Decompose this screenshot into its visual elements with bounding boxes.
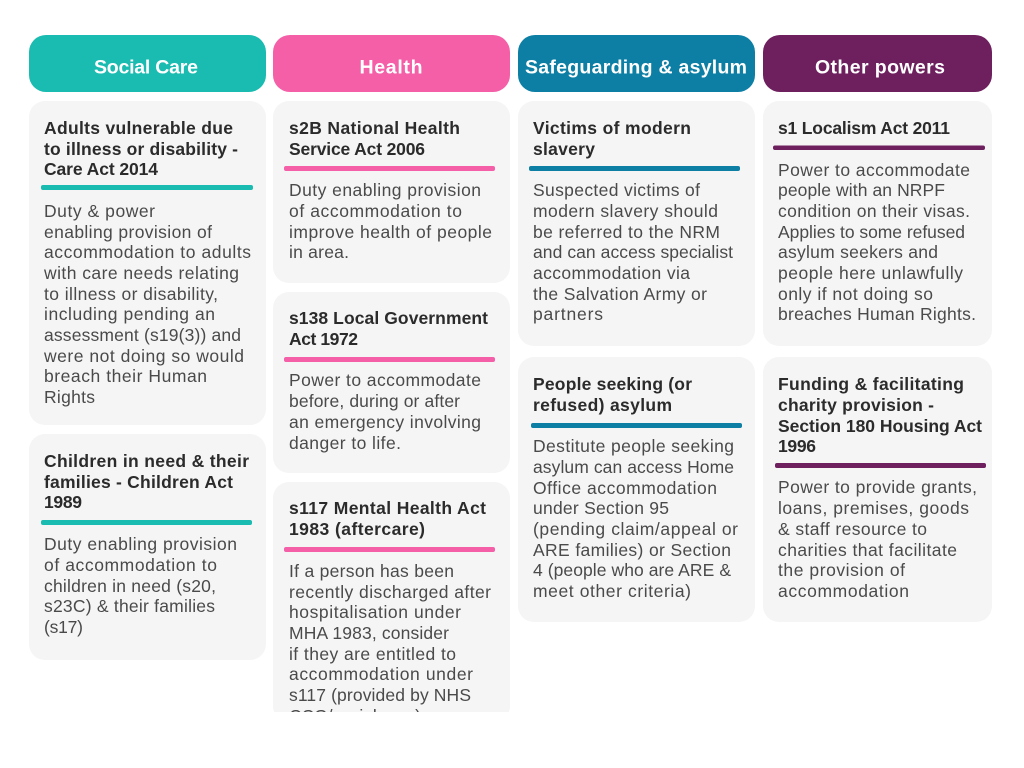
card: People seeking (or refused) asylum: People seeking (or [533,374,692,394]
card: Adults vulnerable, Care Act 2014 [29,101,266,425]
card: Adults vulnerable, Care Act 2014: Duty & power [44,201,155,221]
card: People seeking (or refused) asylum: meet other criteria) [533,581,691,601]
card: s2B National Health Service Act 2006: in area. [289,242,349,262]
header: Health [273,35,510,92]
card: Adults vulnerable, Care Act 2014: accommodation to adults [44,242,251,262]
card: Funding & facilitating charity provision, Section 180: Funding & facilitating [778,374,964,394]
card: Victims of modern slavery: slavery [533,139,595,159]
card: s117 Mental Health Act 1983 (aftercare): hospitalisation under [289,602,461,622]
card: Adults vulnerable, Care Act 2014: with care needs relating [43,263,239,283]
card: Victims of modern slavery: the Salvation Army or [533,284,707,304]
card: s117 Mental Health Act 1983 (aftercare): recently discharged after [289,582,491,602]
card: People seeking (or refused) asylum [518,357,755,622]
card: Children in need, Children Act 1989: 1989 [44,492,82,512]
card: Victims of modern slavery [518,101,755,346]
card: Children in need, Children Act 1989: families - Children Act [44,472,233,492]
card: People seeking (or refused) asylum: 4 (people who are ARE & [533,560,731,580]
card: Funding & facilitating charity provision, Section 180: loans, premises, goods [778,498,969,518]
card: Adults vulnerable, Care Act 2014: including pending an [44,304,215,324]
card: s1 Localism Act 2011 [763,101,992,346]
card: Funding & facilitating charity provision, Section 180: Section 180 Housing Act [778,416,982,436]
header: Safeguarding & asylum: Safeguarding & asylum [525,56,747,78]
card: s2B National Health Service Act 2006: improve health of people [289,222,492,242]
card: s117 Mental Health Act 1983 (aftercare): s117 (provided by NHS [289,685,471,705]
card: s2B National Health Service Act 2006 [273,101,510,283]
card: s138 Local Government Act 1972 [273,292,510,473]
card: s138 Local Government Act 1972: an emergency involving [289,412,481,432]
card: s1 Localism Act 2011: condition on their visas. [778,201,970,221]
card: People seeking (or refused) asylum: (pending claim/appeal or [533,519,738,539]
card: Funding & facilitating charity provision, Section 180: the provision of [778,560,905,580]
card: Victims of modern slavery: and can access specialist [533,242,733,262]
card: s1 Localism Act 2011: asylum seekers and [778,242,938,262]
card: s117 Mental Health Act 1983 (aftercare) [273,482,510,726]
card: s138 Local Government Act 1972: Power to accommodate [289,370,481,390]
header: Health: Health [360,56,422,78]
card: Funding & facilitating charity provision, Section 180: & staff resource to [778,519,927,539]
card: Children in need, Children Act 1989: Children in need & their [44,451,249,471]
card: Adults vulnerable, Care Act 2014: Care Act 2014 [44,159,158,179]
card: Adults vulnerable, Care Act 2014: Adults vulnerable due [44,118,233,138]
card: Children in need, Children Act 1989: (s17) [44,617,83,637]
card: s2B National Health Service Act 2006: Service Act 2006 [289,139,425,159]
card: s117 Mental Health Act 1983 (aftercare): 1983 (aftercare) [289,519,425,539]
card: s1 Localism Act 2011: Applies to some refused [778,222,965,242]
header: Other powers [763,35,992,92]
card: Victims of modern slavery: Suspected victims of [533,180,700,200]
card: s138 Local Government Act 1972: danger to life. [289,433,401,453]
card: People seeking (or refused) asylum: asylum can access Home [533,457,734,477]
card: s117 Mental Health Act 1983 (aftercare): if they are entitled to [289,644,456,664]
card: Adults vulnerable, Care Act 2014: were not doing so would [43,346,244,366]
panel: Social Care column [29,35,266,660]
card: s2B National Health Service Act 2006: Duty enabling provision [289,180,481,200]
card: People seeking (or refused) asylum: Office accommodation [533,478,717,498]
card: People seeking (or refused) asylum: ARE families) or Section [533,540,731,560]
panel: Health column [273,35,510,726]
card: Funding & facilitating charity provision, Section 180 [763,357,992,622]
card: Adults vulnerable, Care Act 2014: to illness or disability - [44,139,238,159]
card: s2B National Health Service Act 2006: of accommodation to [289,201,462,221]
card: Adults vulnerable, Care Act 2014: Rights [44,387,95,407]
card: Children in need, Children Act 1989 [29,434,266,660]
card: s138 Local Government Act 1972: before, during or after [289,391,460,411]
card: People seeking (or refused) asylum: under Section 95 [533,498,669,518]
card: People seeking (or refused) asylum: Destitute people seeking [533,436,734,456]
card: Funding & facilitating charity provision, Section 180: accommodation [778,581,909,601]
header: Social Care [29,35,266,92]
card: Funding & facilitating charity provision, Section 180: charities that facilitate [778,540,957,560]
card: s117 Mental Health Act 1983 (aftercare): If a person has been [289,561,454,581]
header: Other powers: Other powers [815,56,945,78]
header: Safeguarding & asylum [518,35,755,92]
card: s1 Localism Act 2011: people here unlawfully [778,263,963,283]
card: s1 Localism Act 2011: only if not doing so [778,284,933,304]
card: Children in need, Children Act 1989: children in need (s20, [44,576,216,596]
card: s117 Mental Health Act 1983 (aftercare): accommodation under [289,664,473,684]
panel: Other powers column [763,35,992,622]
card: s117 Mental Health Act 1983 (aftercare): MHA 1983, consider [289,623,449,643]
card: s117 Mental Health Act 1983 (aftercare): CCG/social care) [289,706,421,726]
card: Adults vulnerable, Care Act 2014: assessment (s19(3)) and [44,325,241,345]
card: Victims of modern slavery: accommodation via [533,263,690,283]
panel: Safeguarding & asylum column [518,35,755,622]
card: s138 Local Government Act 1972: s138 Local Government [289,308,488,328]
card: s1 Localism Act 2011: breaches Human Rights. [778,304,976,324]
card: s1 Localism Act 2011: s1 Localism Act 2011 [778,118,950,138]
card: Victims of modern slavery: be referred to the NRM [533,222,720,242]
card: Children in need, Children Act 1989: s23C) & their families [44,596,215,616]
card: Adults vulnerable, Care Act 2014: to illness or disability, [44,284,218,304]
header: Social Care: Social Care [94,56,198,78]
card: Children in need, Children Act 1989: of accommodation to [44,555,217,575]
card: s1 Localism Act 2011: Power to accommodate [778,160,970,180]
card: Funding & facilitating charity provision, Section 180: Power to provide grants, [778,477,977,497]
card: s138 Local Government Act 1972: Act 1972 [289,329,358,349]
card: s1 Localism Act 2011: people with an NRPF [778,180,945,200]
card: s2B National Health Service Act 2006: s2B National Health [289,118,460,138]
card: People seeking (or refused) asylum: refused) asylum [533,395,672,415]
card: Victims of modern slavery: Victims of modern [533,118,691,138]
card: Victims of modern slavery: partners [533,304,603,324]
card: Children in need, Children Act 1989: Duty enabling provision [44,534,237,554]
card: s117 Mental Health Act 1983 (aftercare): s117 Mental Health Act [289,498,486,518]
card: Adults vulnerable, Care Act 2014: enabling provision of [44,222,212,242]
card: Funding & facilitating charity provision, Section 180: charity provision - [778,395,934,415]
card: Victims of modern slavery: modern slavery should [533,201,718,221]
card: Adults vulnerable, Care Act 2014: breach their Human [44,366,207,386]
card: Funding & facilitating charity provision, Section 180: 1996 [778,436,816,456]
